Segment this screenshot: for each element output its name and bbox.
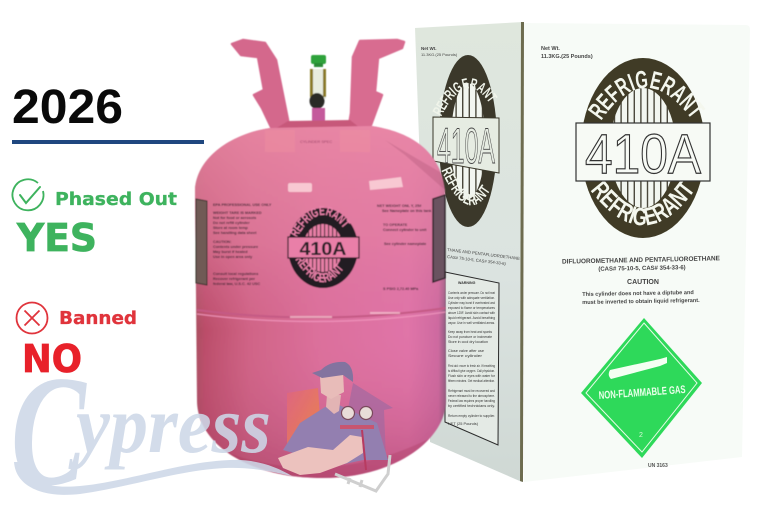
yes value: YES <box>16 216 97 260</box>
warning box: Do not puncture or incinerate <box>448 335 492 339</box>
left body text: Contents under pressure <box>213 245 258 249</box>
warning box: Close valve after use <box>448 349 484 353</box>
carton front face: 11.3KG.(25 Pounds) <box>541 54 593 60</box>
carton left face: 11.3KG.(25 Pounds) <box>421 52 458 57</box>
left body text <box>213 203 272 286</box>
neck <box>326 395 341 414</box>
left handle <box>232 40 288 128</box>
non-flammable gas diamond <box>581 318 702 458</box>
carton front face <box>541 46 721 469</box>
carton side logo: REFRIGERANT <box>432 78 498 116</box>
warning box: Contents under pressure. Do not heat <box>448 291 495 295</box>
left body text: Not for food or aerosols <box>213 216 256 220</box>
valve <box>310 55 326 122</box>
collar <box>275 120 360 129</box>
icon: check circle <box>12 179 43 210</box>
phased out status <box>12 179 177 260</box>
right body text: TO OPERATE <box>383 223 408 227</box>
left body text: Store at room temp <box>213 226 248 230</box>
panel: refrigerant carton <box>415 22 721 482</box>
cylinder 410A logo: REFRIGERANT <box>294 258 344 284</box>
warning box: above 125F. Avoid skin contact with <box>448 311 495 315</box>
front 410A logo <box>575 58 711 238</box>
left body text: Recover refrigerant per <box>213 277 256 281</box>
warning box: Federal law requires proper handling <box>448 399 495 403</box>
carton side weight text: Net Wt. <box>421 46 436 51</box>
right side dark label <box>433 195 445 282</box>
gray clipboard <box>335 455 390 491</box>
front 410A logo: 410A <box>585 122 702 185</box>
warning box: vapor. Use in well ventilated areas. <box>448 321 495 325</box>
shirt <box>283 404 388 465</box>
front 410A logo: REFRIGERANT <box>590 182 693 226</box>
left body text: WEIGHT TARE IS MARKED <box>213 211 262 215</box>
right body text: See Nameplate on this tank <box>382 209 432 213</box>
warning box: Cylinder may burst if overheated and <box>448 301 495 305</box>
warning box: Use only with adequate ventilation. <box>448 296 495 300</box>
title underline <box>12 140 204 144</box>
carton side logo <box>432 55 500 227</box>
warning box <box>445 272 499 445</box>
caution text: CAUTION <box>627 279 659 286</box>
non-flammable gas diamond: 2 <box>639 432 643 439</box>
right body text: Connect cylinder to unit <box>383 228 427 232</box>
mechanic illustration <box>278 362 393 491</box>
logo swoosh <box>14 460 292 495</box>
warning box: is difficult give oxygen. Call physician. <box>448 369 495 373</box>
non-flammable gas diamond: NON-FLAMMABLE GAS <box>598 384 686 402</box>
right handle <box>349 40 404 127</box>
icon: x circle <box>16 302 48 334</box>
warning box: fifteen minutes. Get medical attention. <box>448 379 495 383</box>
UN number: UN 3163 <box>648 463 668 469</box>
warning box: WARNING <box>458 281 476 285</box>
dome stamp: CYLINDER SPEC <box>300 139 332 144</box>
warning box: First aid: move to fresh air. If breathing <box>448 364 495 368</box>
left body text: federal law, U.S.C. 42 USC <box>213 282 260 286</box>
logo wordmark: ypress <box>68 379 271 470</box>
warning box: exposed to flame or temperatures <box>448 306 495 310</box>
right body text: NET WEIGHT ONL Y, 25# <box>377 204 422 208</box>
forearm <box>278 435 363 475</box>
cylinder body <box>195 126 446 478</box>
left body text: Do not refill cylinder <box>213 221 250 225</box>
front 410A logo: REFRIGERANT <box>588 70 705 120</box>
purple roof <box>340 383 393 460</box>
cylinder 410A logo <box>286 206 360 288</box>
warning box: liquid refrigerant. Avoid breathing <box>448 316 495 320</box>
carton left face <box>415 22 524 482</box>
caution text: This cylinder does not have a diptube and <box>582 290 694 298</box>
carton side logo: 410A <box>437 118 495 174</box>
warning box: NET (25 Pounds) <box>448 422 478 426</box>
dome highlights <box>288 177 403 318</box>
right body text <box>377 204 432 291</box>
warning box: never released to the atmosphere. <box>448 394 495 398</box>
warning box: Secure cylinder <box>448 354 483 358</box>
chemical names text: (CAS# 75-10-5, CAS# 354-33-6) <box>598 265 686 273</box>
right body text: See cylinder nameplate <box>384 242 426 246</box>
warning box: Flush skin or eyes with water for <box>448 374 496 378</box>
warning box: Refrigerant must be recovered and <box>448 389 495 393</box>
banned label: Banned <box>59 308 137 329</box>
face <box>320 372 344 399</box>
left side dark label <box>196 199 207 285</box>
chemical names text <box>562 255 721 273</box>
left body text: See handling data sheet <box>213 231 257 235</box>
caution text <box>582 279 700 306</box>
title: 2026: 2026 <box>12 81 123 134</box>
banned status <box>16 302 137 381</box>
watermark: Cypress logo <box>11 343 292 512</box>
no value: NO <box>22 337 82 381</box>
left body text: CAUTION: <box>213 240 232 244</box>
carton side logo: REFRIGERANT <box>441 166 490 206</box>
right body text: S PSIG 2,72.40 MPa <box>383 287 419 291</box>
gauges <box>340 406 374 470</box>
warning box: Store in cool dry location <box>448 340 488 344</box>
chemical names text: DIFLUOROMETHANE AND PENTAFLUOROETHANE <box>562 255 721 266</box>
orange house <box>287 388 322 450</box>
carton side chemical text: THANE AND PENTAFLUOROETHANE <box>447 247 520 261</box>
cylinder 410A logo: REFRIGERANT <box>290 206 351 238</box>
cylinder 410A logo: 410A <box>300 239 347 259</box>
caution text: must be inverted to obtain liquid refrigerant. <box>582 298 700 306</box>
cap <box>312 362 353 382</box>
left body text: Consult local regulations <box>213 272 258 276</box>
panel: pink refrigerant cylinder <box>194 38 447 479</box>
warning box: Keep away from heat and sparks <box>448 330 492 334</box>
left body text: May burst if heated <box>213 250 248 254</box>
carton side chemical text: CAS# 75-10-5, CAS# 354-33-6) <box>447 254 507 266</box>
warning box: Return empty cylinder to supplier. <box>448 414 495 418</box>
phased out label: Phased Out <box>55 189 177 210</box>
left body text: EPA PROFESSIONAL USE ONLY <box>213 203 272 207</box>
left body text: Use in open area only <box>213 255 253 259</box>
net weight text: Net Wt. <box>541 46 560 52</box>
warning box: by certified technicians only. <box>448 404 495 408</box>
gas cylinder icon <box>609 357 667 379</box>
